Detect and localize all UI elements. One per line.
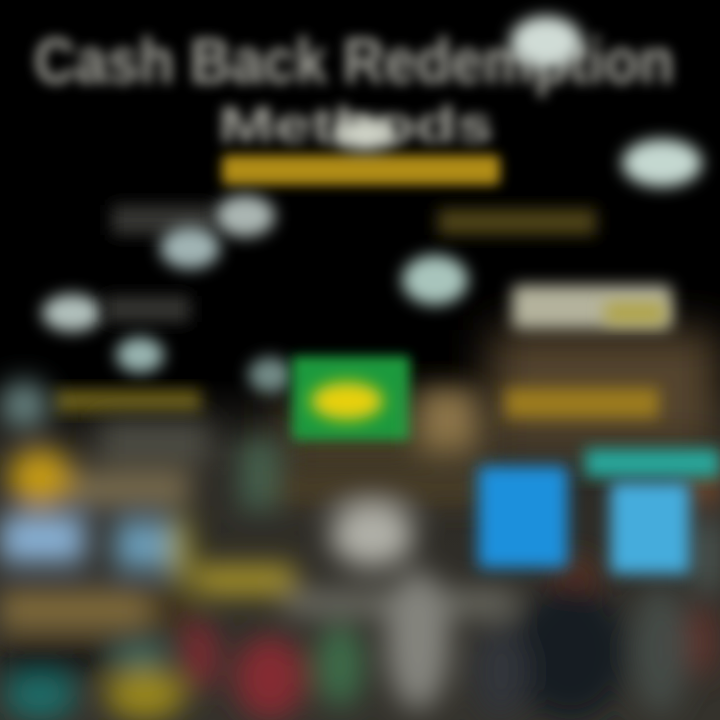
gold sign: left [55, 390, 201, 412]
title [34, 25, 674, 153]
callout: left bubbles [112, 195, 275, 269]
screen: blue display right [585, 449, 720, 574]
title: Methods [218, 97, 494, 153]
gold sign: right [505, 388, 659, 418]
icon: small bubble [248, 357, 292, 393]
callout: left text row [42, 294, 190, 373]
callout: gold label [438, 209, 596, 235]
icon: glowing light top [510, 16, 582, 68]
callout: right sign [512, 285, 672, 329]
icon: Brazil-style flag [292, 356, 410, 440]
market stalls and crowd [0, 381, 720, 720]
heading highlight bar [222, 155, 500, 185]
screen: blue display left [478, 466, 568, 568]
icon: glowing light right [622, 139, 702, 187]
icon: centre bubble [402, 255, 468, 305]
icon: glowing bubble on title [333, 118, 397, 150]
